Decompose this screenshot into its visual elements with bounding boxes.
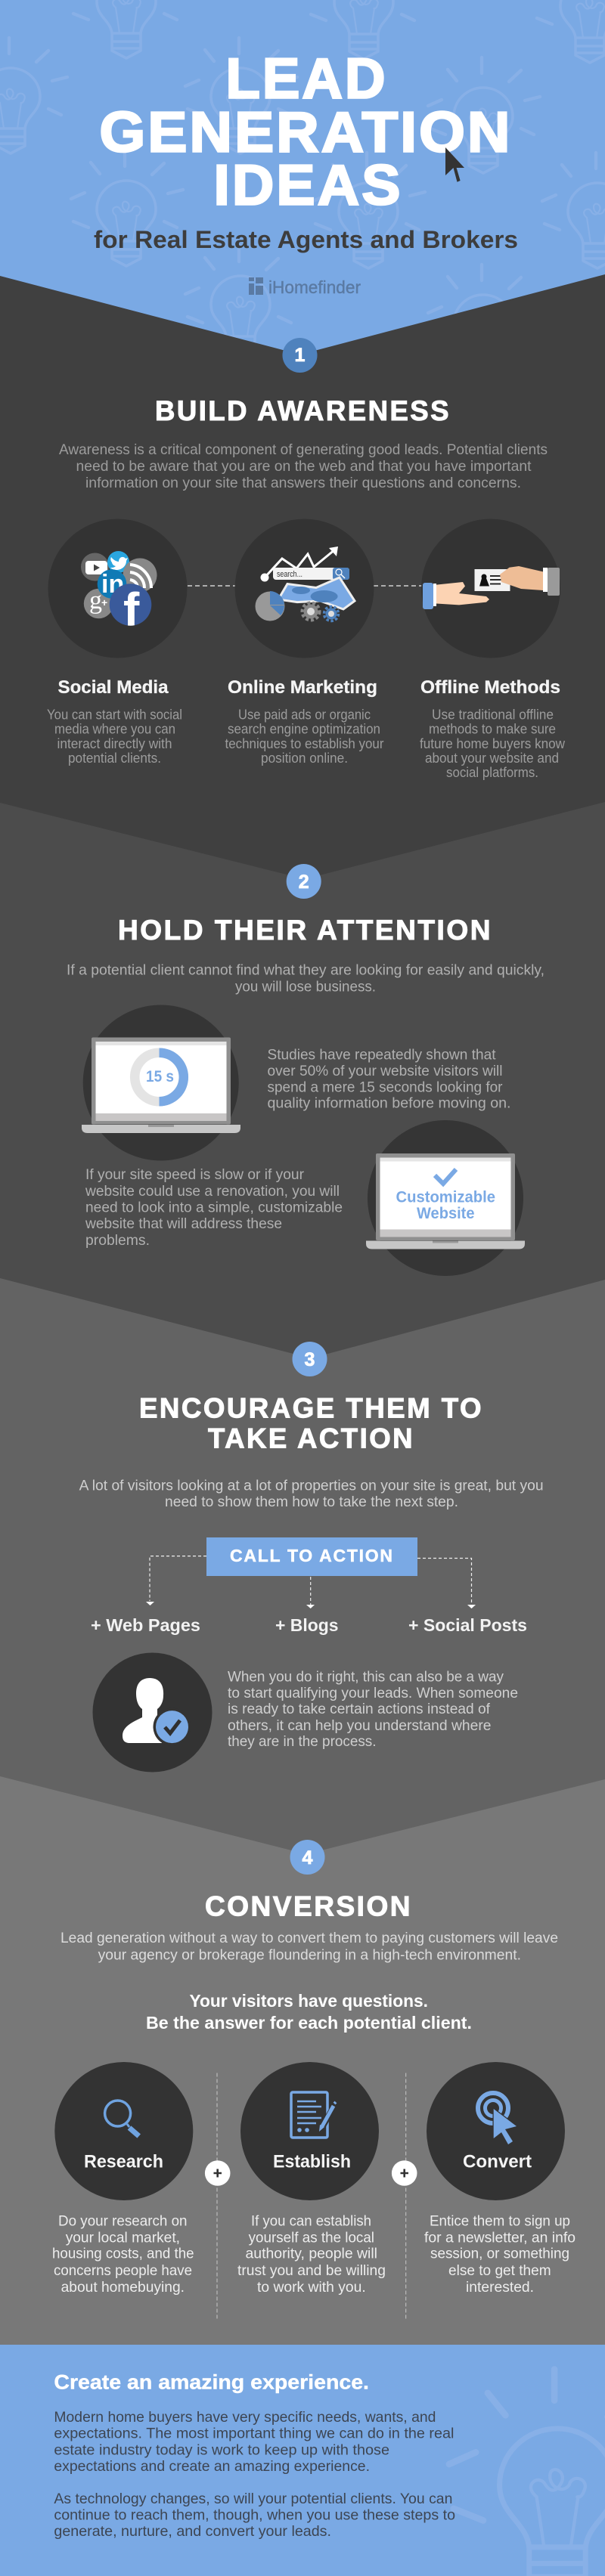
- icon: social media: in: [101, 570, 124, 599]
- laptop: customizable website: Website: [417, 1205, 475, 1222]
- step: establish: Establish: [273, 2151, 351, 2172]
- text: research: your local market,: [66, 2230, 180, 2246]
- panel: step 2 hold their attention: [0, 802, 605, 1361]
- intro text: A lot of visitors looking at a lot of properties on your site is great, but you: [79, 1478, 544, 1494]
- text: studies: quality information before moving on.: [268, 1095, 511, 1112]
- heading: TAKE ACTION: [208, 1423, 414, 1454]
- labels: link types: + Web Pages: [91, 1615, 200, 1635]
- text: establish: If you can establish: [251, 2213, 371, 2230]
- number badge 1: [283, 338, 318, 373]
- laptop: 15 seconds: 15 s: [146, 1068, 174, 1085]
- column: offline methods: about your website and: [425, 751, 559, 766]
- text: convert: interested.: [466, 2279, 534, 2296]
- title: GENERATION: [100, 101, 513, 164]
- text: establish: to work with you.: [257, 2279, 366, 2296]
- icon: qualified user: [92, 1652, 212, 1772]
- icon: document and pen: [291, 2092, 336, 2138]
- text: studies: [268, 1047, 511, 1112]
- icon: target and cursor: [478, 2093, 517, 2144]
- heading: ENCOURAGE THEM TO: [139, 1392, 483, 1424]
- subheading: Your visitors have questions.: [189, 1991, 428, 2011]
- subheading: [146, 1991, 472, 2033]
- text: site speed: need to look into a simple, customizable: [85, 1200, 343, 1216]
- number badge 3: [292, 1342, 327, 1376]
- text: site speed: problems.: [85, 1232, 150, 1249]
- column: offline methods: [420, 677, 566, 780]
- step: convert: [427, 2062, 565, 2200]
- text: site speed: website could use a renovation, you will: [85, 1183, 340, 1200]
- title: LEAD: [225, 47, 387, 110]
- panel: footer: [0, 2345, 605, 2576]
- call to action button: [206, 1537, 417, 1576]
- icon: magnifier: [105, 2101, 139, 2136]
- text: convert: session, or something: [430, 2246, 569, 2262]
- intro text: [59, 441, 548, 491]
- number badge 2: [287, 864, 321, 899]
- icon: social media: +: [101, 596, 107, 608]
- intro text: you will lose business.: [235, 979, 376, 995]
- icon: online marketing: [234, 519, 374, 658]
- step: establish: [240, 2062, 379, 2200]
- arrows: dashed connectors: [146, 1556, 476, 1608]
- heading: [139, 1392, 483, 1454]
- intro text: Lead generation without a way to convert them to paying customers will leave: [60, 1930, 558, 1946]
- footer heading: Create an amazing experience.: [54, 2371, 369, 2394]
- column: online marketing: techniques to establish your: [225, 736, 384, 751]
- text: qualifying leads: is ready to take certain actions instead of: [228, 1701, 491, 1717]
- heading: CONVERSION: [205, 1891, 412, 1921]
- icon: social media: g: [89, 587, 102, 615]
- panel: step 3 encourage them to take action: [0, 1278, 605, 1859]
- footer paragraph 2: continue to reach them, though, when you use these steps to: [54, 2506, 455, 2523]
- column: offline methods: methods to make sure: [429, 722, 556, 737]
- intro text: need to show them how to take the next step.: [165, 1494, 458, 1510]
- intro text: [67, 961, 544, 995]
- text: site speed: website that will address these: [85, 1215, 282, 1232]
- column: social media: interact directly with: [57, 736, 172, 751]
- plus icon left: [205, 2160, 231, 2186]
- column: offline methods: Offline Methods: [420, 677, 560, 698]
- text: establish: yourself as the local: [249, 2230, 374, 2246]
- text: studies: over 50% of your website visitors will: [268, 1063, 502, 1079]
- intro text: your agency or brokerage floundering in a high-tech environment.: [98, 1947, 521, 1963]
- step: research: Research: [84, 2151, 163, 2172]
- title: IDEAS: [213, 153, 402, 217]
- text: convert: for a newsletter, an info: [424, 2230, 576, 2246]
- background light bulb pattern: [0, 0, 605, 380]
- laptop: 15 seconds: [82, 1005, 240, 1161]
- number badge 3: 3: [305, 1349, 315, 1370]
- text: convert: Entice them to sign up: [430, 2213, 570, 2230]
- logo: iHomefinder: iHomefinder: [268, 277, 361, 297]
- text: studies: Studies have repeatedly shown that: [268, 1047, 496, 1064]
- labels: link types: + Social Posts: [408, 1615, 527, 1635]
- number badge 4: [290, 1840, 325, 1875]
- column: offline methods: future home buyers know: [420, 736, 566, 751]
- heading: HOLD THEIR ATTENTION: [118, 915, 492, 946]
- text: research: housing costs, and the: [52, 2246, 194, 2262]
- intro text: information on your site that answers their questions and concerns.: [85, 475, 521, 491]
- subheading: Be the answer for each potential client.: [146, 2013, 472, 2033]
- text: research: Do your research on: [58, 2213, 188, 2230]
- intro text: [60, 1930, 558, 1963]
- footer paragraph 1: [54, 2409, 454, 2475]
- number badge 1: 1: [295, 345, 306, 366]
- intro text: [79, 1478, 544, 1510]
- panel: header: [0, 0, 605, 380]
- text: studies: spend a mere 15 seconds looking for: [268, 1079, 503, 1095]
- text: site speed: If your site speed is slow or if your: [85, 1166, 304, 1183]
- footer paragraph 2: generate, nurture, and convert your leads.: [54, 2523, 331, 2540]
- panel: step 4 conversion: [0, 1776, 605, 2345]
- text: qualifying leads: When you do it right, this can also be a way: [228, 1669, 504, 1686]
- column: online marketing: [225, 677, 384, 766]
- intro text: Awareness is a critical component of generating good leads. Potential clients: [59, 441, 548, 458]
- text: research: about homebuying.: [61, 2279, 185, 2296]
- text: establish: trust you and be willing: [237, 2262, 386, 2279]
- laptop: customizable website: Customizable: [396, 1189, 495, 1206]
- footer paragraph 1: Modern home buyers have very specific needs, wants, and: [54, 2409, 436, 2426]
- column: online marketing: Online Marketing: [228, 677, 377, 698]
- column: social media: potential clients.: [68, 751, 161, 766]
- text: research: concerns people have: [54, 2262, 192, 2279]
- text: qualifying leads: to start qualifying your leads. When someone: [228, 1686, 518, 1701]
- laptop: customizable website: [366, 1120, 525, 1276]
- icon: social media: [48, 519, 188, 658]
- footer paragraph 1: estate industry today is work to keep up with those: [54, 2441, 389, 2458]
- intro text: need to be aware that you are on the web and that you have important: [76, 458, 532, 475]
- footer paragraph 2: [54, 2491, 455, 2540]
- dashed dividers: [217, 2073, 406, 2321]
- icon: online marketing: search...: [277, 570, 302, 579]
- icon: light bulb: [446, 2366, 605, 2576]
- step: research: [54, 2062, 193, 2200]
- text: establish: authority, people will: [245, 2246, 377, 2262]
- number badge 4: 4: [302, 1847, 313, 1869]
- column: social media: Social Media: [57, 677, 169, 698]
- column: online marketing: position online.: [261, 751, 348, 766]
- text: qualifying leads: they are in the process.: [228, 1734, 377, 1750]
- connector lines: [188, 585, 422, 587]
- plus icon right: [392, 2160, 417, 2186]
- icon: offline methods: [421, 519, 560, 658]
- text: qualifying leads: [228, 1669, 518, 1750]
- column: social media: [47, 677, 182, 766]
- text: convert: else to get them: [448, 2262, 551, 2279]
- footer paragraph 1: expectations and create an amazing experience.: [54, 2458, 370, 2475]
- footer paragraph 1: expectations. The most important thing we can do in the real: [54, 2425, 454, 2441]
- intro text: If a potential client cannot find what they are looking for easily and quickly,: [67, 961, 544, 978]
- column: offline methods: Use traditional offline: [432, 707, 554, 723]
- column: online marketing: Use paid ads or organic: [238, 707, 371, 723]
- text: qualifying leads: others, it can help you understand where: [228, 1718, 492, 1734]
- number badge 2: 2: [299, 872, 309, 893]
- column: social media: media where you can: [54, 722, 175, 737]
- column: online marketing: search engine optimization: [228, 722, 380, 737]
- panel: step 1 build awareness: [0, 274, 605, 884]
- text: site speed: [85, 1166, 343, 1249]
- text: establish: [237, 2213, 386, 2296]
- heading: BUILD AWARENESS: [155, 395, 451, 426]
- labels: link types: + Blogs: [275, 1615, 339, 1635]
- footer paragraph 2: As technology changes, so will your potential clients. You can: [54, 2491, 452, 2507]
- icon: mouse cursor: [445, 147, 464, 182]
- column: offline methods: social platforms.: [446, 765, 538, 780]
- step: convert: Convert: [463, 2151, 532, 2172]
- column: social media: You can start with social: [47, 707, 182, 723]
- subtitle: for Real Estate Agents and Brokers: [94, 226, 518, 253]
- text: research: [52, 2213, 194, 2296]
- title: [100, 47, 513, 217]
- text: convert: [424, 2213, 576, 2296]
- icon: social media: f: [123, 583, 140, 637]
- call to action button: CALL TO ACTION: [230, 1546, 392, 1565]
- labels: link types: [91, 1615, 527, 1635]
